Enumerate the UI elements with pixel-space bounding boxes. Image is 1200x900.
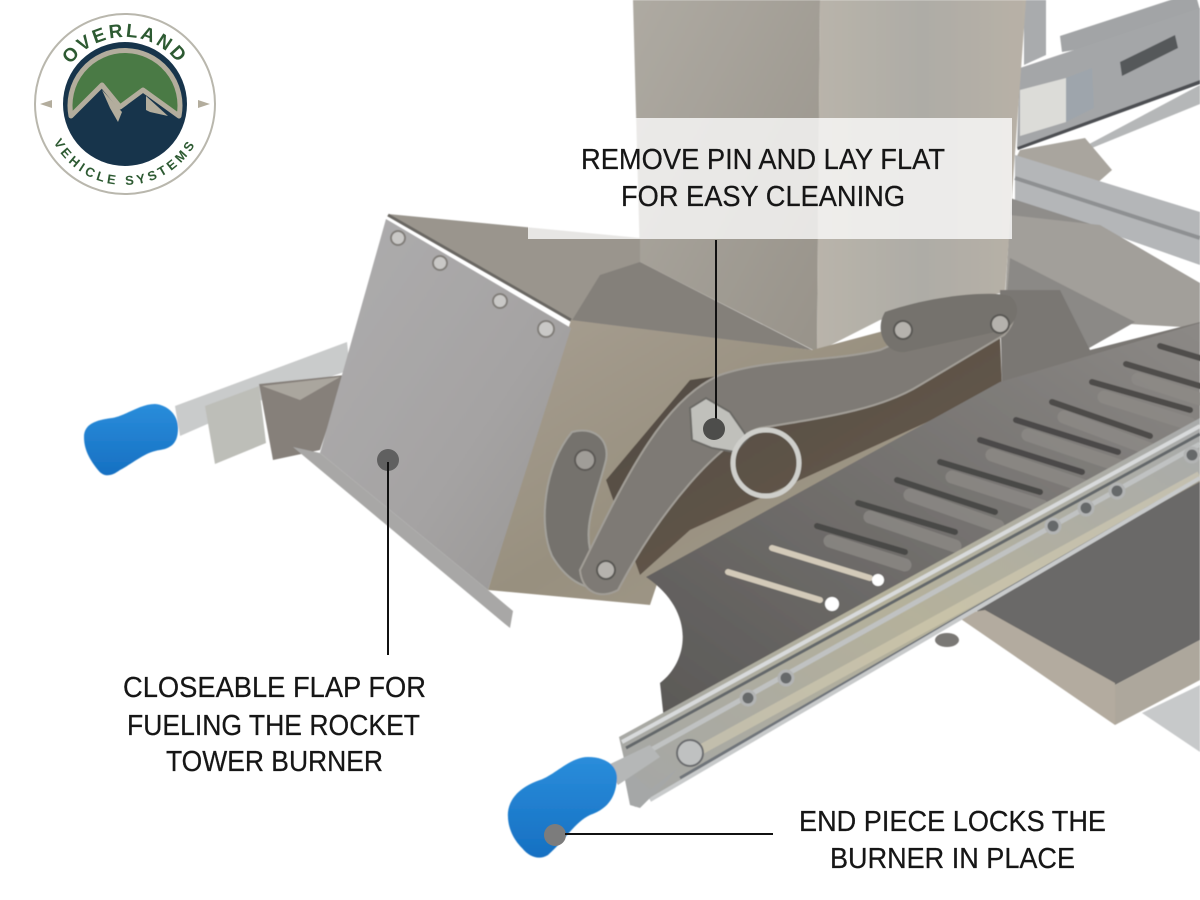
callout text: FOR EASY CLEANING	[621, 181, 905, 213]
flap text: FUELING THE ROCKET	[127, 710, 420, 742]
burner body front	[488, 300, 1000, 605]
small link plate	[545, 430, 607, 587]
shadowed underside behind arm	[606, 335, 1002, 575]
flap text: CLOSEABLE FLAP FOR	[123, 672, 426, 704]
end piece text	[799, 806, 1106, 875]
callout: remove pin	[528, 118, 1012, 440]
callout text: REMOVE PIN AND LAY FLAT	[581, 144, 945, 176]
logo snow caps	[102, 90, 168, 122]
callout text	[581, 144, 945, 213]
bottom blue knob	[508, 757, 617, 858]
right backplate	[1000, 290, 1200, 392]
rail fasteners	[741, 448, 1199, 705]
logo text bottom: VEHICLE SYSTEMS	[55, 138, 194, 185]
logo text top: OVERLAND	[63, 24, 185, 62]
left blue knob	[84, 404, 178, 475]
upper right rails and frame	[1005, 0, 1200, 352]
logo arrows	[40, 100, 210, 108]
pointer line to pin	[703, 240, 725, 440]
tower right face	[817, 0, 1026, 352]
left slide rail	[175, 342, 350, 464]
tray under grate	[975, 465, 1200, 685]
flap lower tab	[293, 447, 513, 628]
burner box top	[388, 214, 812, 350]
front slide rail	[619, 418, 1200, 807]
flap text: TOWER BURNER	[166, 746, 383, 778]
link rivets	[597, 315, 1009, 579]
tower left face	[633, 0, 820, 352]
grate raised tabs	[830, 379, 1200, 565]
rail end pin	[677, 740, 703, 766]
upper link plate	[881, 294, 1017, 352]
grate plate	[646, 323, 1200, 720]
main arm	[580, 296, 1014, 594]
flap pointer	[377, 449, 399, 655]
locking pin	[690, 398, 799, 496]
end piece text: END PIECE LOCKS THE	[799, 806, 1106, 838]
flap hinge edge	[388, 215, 571, 320]
connector under silver rail	[1010, 198, 1103, 238]
callout: end piece	[544, 806, 1106, 875]
flap text	[123, 672, 426, 778]
logo: Overland Vehicle Systems	[34, 13, 216, 195]
rail end bracket	[622, 765, 678, 808]
grate slots	[728, 346, 1200, 600]
tan frame plate	[1005, 215, 1200, 352]
callout translucent panel	[528, 118, 1012, 239]
end piece text: BURNER IN PLACE	[830, 843, 1075, 875]
burner flap	[320, 219, 571, 590]
knob stem	[606, 745, 660, 785]
lower silver rail	[1015, 155, 1200, 265]
grate bright notches	[825, 574, 884, 611]
logo green dome	[70, 51, 180, 116]
flap rivets	[391, 231, 554, 337]
pin ring	[733, 430, 799, 496]
callout: closeable flap	[123, 449, 426, 778]
end piece pointer	[544, 824, 773, 846]
